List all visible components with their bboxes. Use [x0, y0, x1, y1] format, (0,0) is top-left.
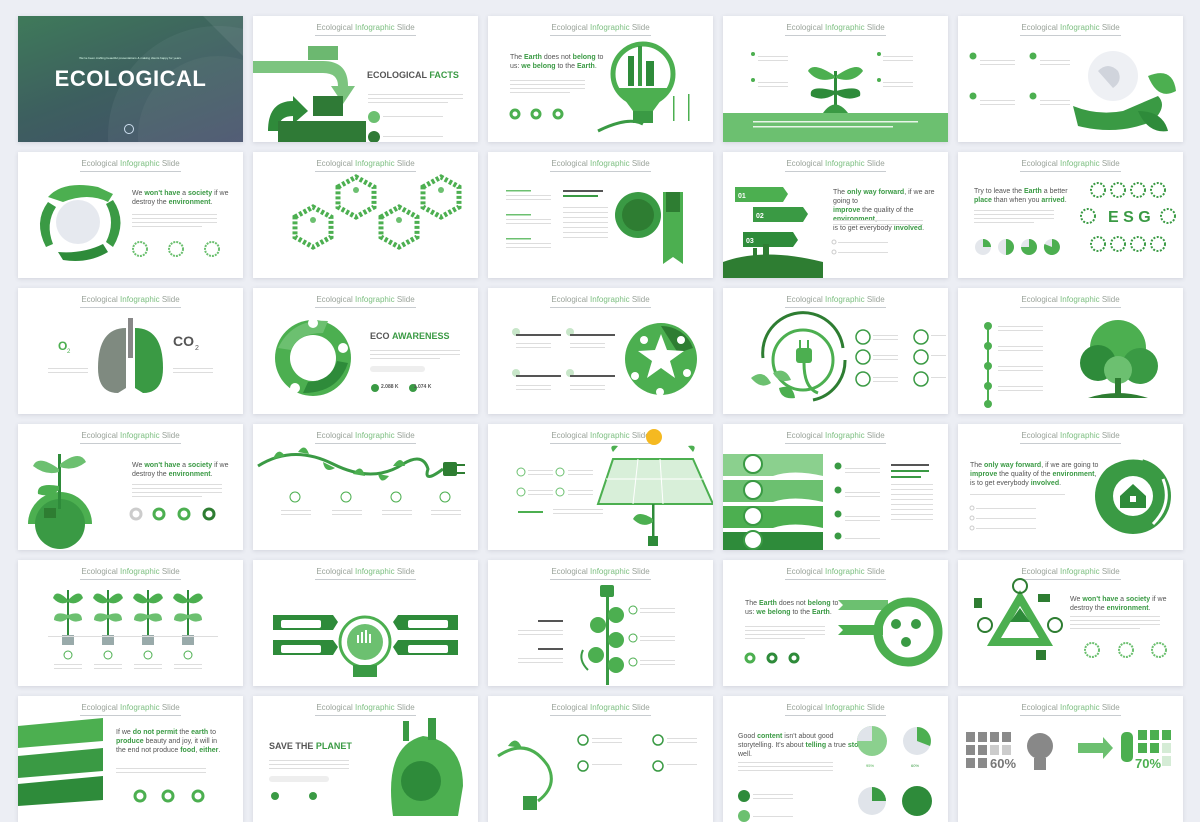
slide: good content pies (partial): [723, 696, 948, 822]
slide: analysis plugs (partial): Ecological Infographic Slide: [551, 703, 650, 712]
plant globe heading: destroy the environment.: [132, 471, 213, 478]
facts heading: ECOLOGICAL FACTS: [367, 70, 459, 80]
slide: save the planet (partial): Ecological Infographic Slide: [316, 703, 415, 712]
slide: earth bulb: [488, 16, 713, 142]
slide: ecological facts: Ecological Infographic Slide: [316, 23, 415, 32]
hands heading: [132, 190, 228, 206]
permit heading: produce beauty and joy, it will in: [116, 738, 217, 745]
slide: tree items: Ecological Infographic Slide: [1021, 295, 1120, 304]
ring heading: The Earth does not belong to: [745, 600, 838, 607]
ESG heading: Try to leave the Earth a better: [974, 188, 1068, 195]
ribbons heading: improve the quality of the environment,: [833, 207, 914, 223]
slide: ribbons earth (partial): Ecological Infographic Slide: [81, 703, 180, 712]
slide: environment analysis globe: Ecological Infographic Slide: [551, 159, 650, 168]
slide: vine plug: [253, 424, 478, 550]
slide: lungs O2 CO2: Ecological Infographic Slide: [81, 295, 180, 304]
slide: ribbons 01 02 03: 01: [738, 193, 746, 200]
slide: lungs O2 CO2: 2: [67, 349, 71, 355]
slide: cover ECOLOGICAL: [18, 16, 243, 142]
slide: good content pies (partial): Ecological Infographic Slide: [786, 703, 885, 712]
slide: save the planet (partial): [253, 696, 478, 822]
leaf circle heading: [970, 462, 1098, 487]
leaf circle heading: is to get everybody involved.: [970, 480, 1061, 487]
recycling heading: [1070, 596, 1166, 612]
slide: leaf house circle: [958, 424, 1183, 550]
slide: solar panel: [488, 424, 713, 550]
slide: bulb eco awareness: Ecological Infographic Slide: [316, 567, 415, 576]
slide: leaf house circle: Ecological Infographic Slide: [1021, 431, 1120, 440]
slide: eco awareness: Ecological Infographic Slide: [316, 295, 415, 304]
permit heading: the end not produce food, either.: [116, 747, 220, 754]
bulb heading: [510, 54, 604, 70]
good content heading: Good content isn't about good: [738, 733, 834, 740]
ribbons heading: is to get everybody involved.: [833, 225, 924, 232]
ring heading: [745, 600, 838, 616]
plant globe heading: We won't have a society if we: [132, 462, 228, 469]
slide: star circle: [488, 288, 713, 414]
slide: bulb eco awareness: [253, 560, 478, 686]
slide: four plants: [18, 560, 243, 686]
ring heading: us: we belong to the Earth.: [745, 609, 832, 616]
hands heading: We won't have a society if we: [132, 190, 228, 197]
slide: ribbons earth (partial): [18, 696, 243, 822]
recycling heading: We won't have a society if we: [1070, 596, 1166, 603]
slide: 60% 70% bulbs (partial): 60%: [990, 756, 1016, 771]
plant globe heading: [132, 462, 228, 478]
slide: ribbons 01 02 03: [723, 152, 948, 278]
slide: four plants: Ecological Infographic Slide: [81, 567, 180, 576]
cover tagline: We've been crafting beautiful presentations & making clients happy for years.: [79, 56, 182, 60]
slide: wave ribbons: Ecological Infographic Slide: [786, 431, 885, 440]
slide: ribbons 01 02 03: 02: [756, 213, 764, 220]
slide: plug ring: [723, 288, 948, 414]
slide: earth ring: Ecological Infographic Slide: [786, 567, 885, 576]
slide: lungs O2 CO2: CO: [173, 333, 194, 349]
slide: lungs O2 CO2: 2: [195, 345, 199, 352]
permit heading: If we do not permit the earth to: [116, 729, 216, 736]
slide: good content pies (partial): 60%: [911, 763, 919, 768]
slide: ribbons 01 02 03: 03: [746, 238, 754, 245]
slide: ESG: E S G: [1108, 209, 1151, 226]
recycling heading: destroy the environment.: [1070, 605, 1151, 612]
leaf circle heading: improve the quality of the environment,: [970, 471, 1096, 478]
slide: hands around globe: [18, 152, 243, 278]
slide: plug ring: Ecological Infographic Slide: [786, 295, 885, 304]
slide: good content pies (partial): 95%: [866, 763, 874, 768]
slide: environment analysis globe: [488, 152, 713, 278]
ribbons heading: [833, 188, 935, 232]
slide: eco awareness: [253, 288, 478, 414]
slide: globe in hand: Ecological Infographic Slide: [1021, 23, 1120, 32]
icon: download: [124, 124, 134, 134]
cover title: ECOLOGICAL: [55, 66, 206, 91]
good content heading: storytelling. It's about telling a true story: [738, 742, 865, 749]
slide: analysis plugs (partial): [488, 696, 713, 822]
slide: ecological facts: [253, 16, 478, 142]
slide: tree circles: [488, 560, 713, 686]
slide: leaf hexagons: [253, 152, 478, 278]
slide: recycling: Ecological Infographic Slide: [1021, 567, 1120, 576]
ribbons heading: The only way forward, if we are going to: [833, 189, 935, 205]
bulb heading: us: we belong to the Earth.: [510, 63, 597, 70]
ESG heading: place than when you arrived.: [974, 197, 1067, 204]
slide: star circle: Ecological Infographic Slide: [551, 295, 650, 304]
slide: ESG: [958, 152, 1183, 278]
slide: wave ribbons: [723, 424, 948, 550]
slide: 60% 70% bulbs (partial): 70%: [1135, 756, 1161, 771]
slide: lungs O2 CO2: [18, 288, 243, 414]
slide: 60% 70% bulbs (partial): Ecological Infographic Slide: [1021, 703, 1120, 712]
ESG heading: [974, 188, 1068, 204]
slide: leaf hexagons: Ecological Infographic Slide: [316, 159, 415, 168]
permit heading: [116, 728, 220, 754]
slide: ribbons 01 02 03: Ecological Infographic Slide: [786, 159, 885, 168]
bulb heading: The Earth does not belong to: [510, 54, 603, 61]
slide: earth ring: [723, 560, 948, 686]
hands heading: destroy the environment.: [132, 199, 213, 206]
slide: recycling: [958, 560, 1183, 686]
slide: tree items: [958, 288, 1183, 414]
slide: vine plug: Ecological Infographic Slide: [316, 431, 415, 440]
awareness numbers: 2.088 K 1.074 K: [381, 384, 431, 390]
slide: plant with band: [723, 16, 948, 142]
leaf circle heading: The only way forward, if we are going to: [970, 462, 1098, 469]
eco awareness heading: ECO AWARENESS: [370, 331, 450, 341]
slide: tree circles: Ecological Infographic Slide: [551, 567, 650, 576]
slide: earth bulb: Ecological Infographic Slide: [551, 23, 650, 32]
good content heading: well.: [738, 751, 752, 758]
slide: globe in hand: [958, 16, 1183, 142]
slide: solar panel: Ecological Infographic Slide: [551, 431, 650, 440]
slide: hands around globe: Ecological Infographic Slide: [81, 159, 180, 168]
slide: plant globe: [18, 424, 243, 550]
slide: ESG: Ecological Infographic Slide: [1021, 159, 1120, 168]
save the planet heading: SAVE THE PLANET: [269, 741, 352, 751]
slide: lungs O2 CO2: O: [58, 339, 67, 353]
slide: plant with band: Ecological Infographic Slide: [786, 23, 885, 32]
good content heading: [738, 732, 865, 758]
slide: 60% 70% bulbs (partial): [958, 696, 1183, 822]
slide: plant globe: Ecological Infographic Slide: [81, 431, 180, 440]
